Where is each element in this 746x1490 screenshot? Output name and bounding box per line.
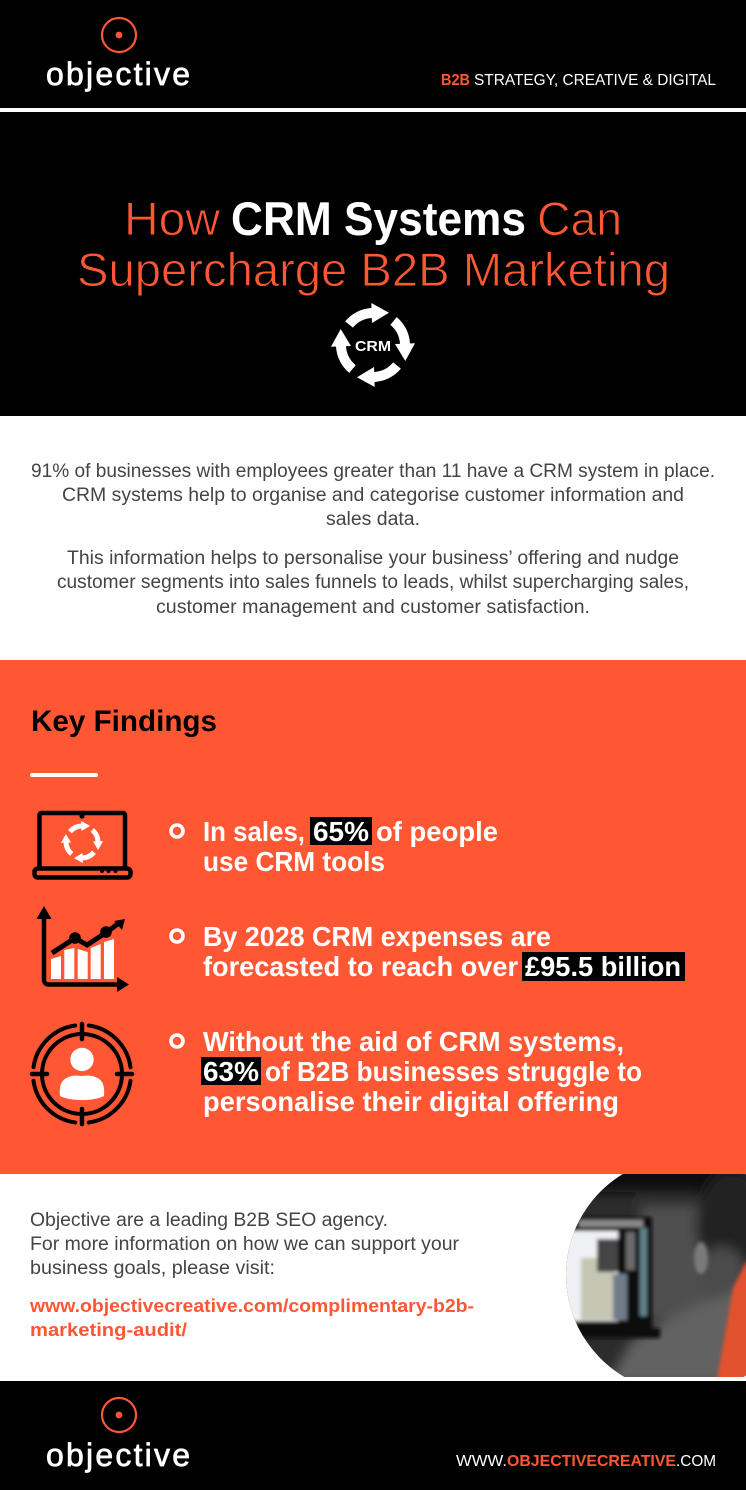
intro paragraph 2: customer management and customer satisfaction.: [156, 597, 590, 618]
cta link: marketing-audit/: [30, 1320, 187, 1340]
footer logo: [46, 1398, 190, 1473]
intro paragraph 1: sales data.: [326, 509, 420, 530]
icon: target person: [32, 1024, 132, 1124]
cta link: www.objectivecreative.com/complimentary-b2b-: [29, 1296, 474, 1316]
intro paragraph 2: customer segments into sales funnels to leads, whilst supercharging sales,: [57, 572, 689, 593]
title: How: [124, 192, 221, 245]
title: Supercharge B2B Marketing: [77, 243, 670, 296]
footer url: [456, 1453, 716, 1470]
header band: [0, 0, 746, 112]
cta link: [29, 1296, 474, 1340]
heading: key findings: Key Findings: [31, 705, 217, 738]
intro paragraph 1: [31, 461, 715, 530]
footer band: [0, 1381, 746, 1490]
finding 3: of B2B businesses struggle to: [265, 1056, 642, 1087]
finding 2: By 2028 CRM expenses are: [203, 921, 551, 952]
cta text: [30, 1210, 460, 1279]
finding 2: [171, 921, 685, 982]
finding 3: Without the aid of CRM systems,: [203, 1026, 624, 1057]
icon: growth chart: [36, 906, 129, 992]
footer url: OBJECTIVECREATIVE: [507, 1453, 676, 1470]
icon: CRM cycle arrows: CRM: [355, 338, 391, 355]
logo: objective: objective: [46, 56, 190, 92]
finding 1: of people: [376, 816, 498, 847]
tagline: STRATEGY, CREATIVE & DIGITAL: [474, 72, 716, 89]
finding 1: use CRM tools: [203, 846, 385, 877]
intro paragraph 2: [57, 548, 689, 618]
photo: person at monitor: [566, 1174, 746, 1377]
finding 3: personalise their digital offering: [203, 1086, 619, 1117]
title: [77, 192, 670, 296]
intro paragraph 1: 91% of businesses with employees greater than 11 have a CRM system in place.: [31, 461, 715, 482]
title: CRM Systems: [231, 192, 526, 245]
intro panel: [0, 416, 746, 660]
finding 1: 65%: [313, 816, 369, 847]
finding 3: 63%: [203, 1056, 259, 1087]
finding 2: forecasted to reach over: [203, 951, 518, 982]
panel: call to action: [0, 1160, 746, 1385]
footer logo: objective: [46, 1437, 190, 1473]
intro paragraph 2: This information helps to personalise your business’ offering and nudge: [67, 548, 679, 569]
icon: laptop: [34, 813, 130, 878]
footer url: WWW.: [456, 1453, 507, 1470]
intro paragraph 1: CRM systems help to organise and categorise customer information and: [62, 485, 684, 506]
finding 1: In sales,: [203, 816, 305, 847]
hero panel: [0, 112, 746, 416]
finding 3: [171, 1026, 642, 1117]
title: Can: [537, 192, 622, 245]
footer url: .COM: [676, 1453, 716, 1470]
tagline: B2B: [441, 72, 470, 89]
icon: CRM cycle arrows: [331, 303, 415, 387]
finding 1: [171, 816, 498, 877]
panel: key findings: [0, 660, 746, 1174]
cta text: business goals, please visit:: [30, 1258, 275, 1279]
cta text: For more information on how we can support your: [30, 1234, 460, 1255]
finding 2: £95.5 billion: [525, 951, 681, 982]
logo: objective: [46, 18, 190, 92]
cta text: Objective are a leading B2B SEO agency.: [30, 1210, 388, 1231]
